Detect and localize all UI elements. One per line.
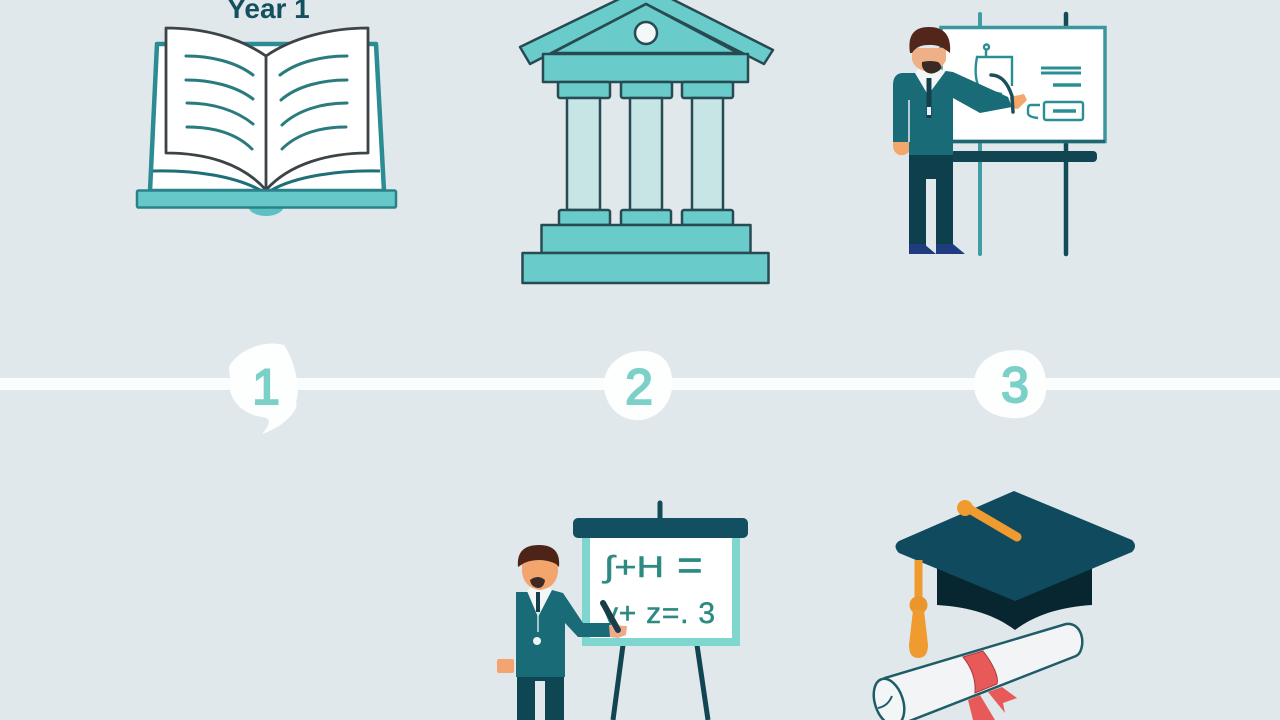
equations: ∫+H (601, 551, 664, 584)
diploma ribbon (963, 651, 1017, 720)
step 2 marker (604, 351, 672, 420)
step 3 marker (974, 350, 1046, 418)
building entablature and capitals (543, 54, 748, 98)
presenter figure (893, 27, 1027, 254)
equations: = (677, 541, 703, 590)
step 2 marker: 2 (625, 359, 653, 415)
whiteboard diagram (976, 44, 1083, 120)
building columns (567, 98, 723, 210)
building bases and steps (522, 210, 768, 283)
step 1 marker (229, 344, 298, 434)
icon: diploma scroll (868, 624, 1082, 720)
step 3 marker: 3 (1001, 357, 1029, 413)
presenter figure (497, 545, 627, 720)
equations (601, 541, 715, 630)
icon: open book (137, 28, 396, 216)
icon: presenter at whiteboard with diagram (893, 14, 1105, 254)
building roof (520, 0, 773, 64)
icon: presenter at easel with equations (497, 503, 748, 720)
step 1 marker: 1 (252, 359, 280, 415)
cap cord and tassel (909, 500, 1017, 658)
icon: graduation cap (896, 491, 1135, 658)
icon: classical building (520, 0, 773, 283)
equations: y+ z=. 3 (603, 597, 715, 630)
timeline line (0, 378, 1280, 390)
